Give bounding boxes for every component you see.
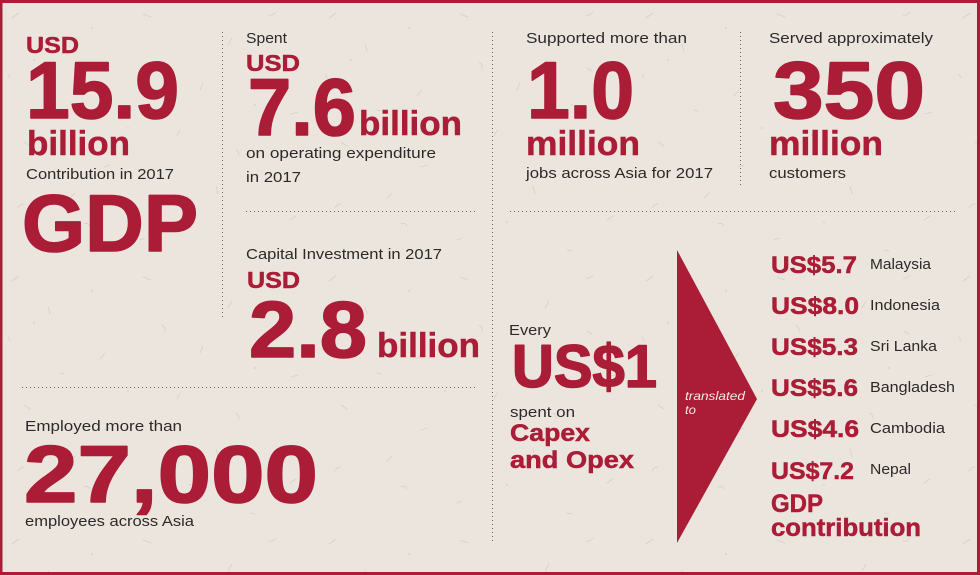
unit: million: million	[769, 125, 883, 163]
unit: million: million	[526, 125, 640, 163]
panel: capital investment	[246, 246, 480, 374]
panel: every US$1 spent	[509, 322, 657, 474]
panel: operating expenditure	[246, 30, 462, 186]
caption: capital investment: Capital Investment in 2017	[246, 246, 442, 263]
row: Cambodia: US$4.6	[771, 416, 859, 443]
figure: 15.9: 15.9	[26, 46, 179, 136]
row: Bangladesh: Bangladesh	[870, 379, 955, 396]
heading: Capex: Capex	[510, 420, 591, 447]
row: Malaysia: Malaysia	[870, 256, 932, 273]
caption: in 2017: in 2017	[246, 169, 301, 186]
figure: 350: 350	[773, 46, 925, 136]
caption: every: Every	[509, 322, 552, 339]
panel: GDP contribution	[22, 32, 198, 269]
row: Malaysia	[771, 252, 932, 279]
heading: USD: USD	[246, 50, 300, 76]
panel: GDP contribution by country	[771, 252, 955, 542]
caption: employees across Asia: employees across Asia	[25, 513, 195, 530]
caption: jobs across Asia: jobs across Asia for 2017	[525, 165, 713, 182]
row: Sri Lanka	[771, 334, 938, 361]
caption: contribution in 2017: Contribution in 2017	[26, 166, 174, 183]
caption: supported more than: Supported more than	[526, 30, 687, 47]
heading: USD: USD	[247, 267, 300, 293]
row: Nepal	[771, 458, 911, 485]
row: Nepal: US$7.2	[771, 458, 854, 485]
row: Sri Lanka: Sri Lanka	[870, 338, 938, 355]
panel: customers	[769, 30, 934, 182]
arrow: translated to: translated	[685, 389, 745, 403]
figure: US$1: US$1	[512, 333, 657, 400]
panel: employees	[24, 418, 318, 530]
unit: billion: billion	[359, 105, 462, 143]
row: Indonesia	[771, 293, 941, 320]
caption: employed more than: Employed more than	[25, 418, 182, 435]
heading: and Opex: and Opex	[510, 447, 635, 474]
caption: spent on: spent on	[510, 404, 575, 421]
figure: 27,000: 27,000	[24, 430, 318, 520]
unit: billion: billion	[377, 327, 480, 365]
row: Indonesia: Indonesia	[870, 297, 941, 314]
arrow: translated to	[677, 250, 757, 543]
panel: jobs	[525, 30, 713, 182]
heading: GDP: GDP	[22, 179, 198, 269]
caption: customers: customers	[769, 165, 846, 182]
arrow: translated to: to	[685, 403, 696, 417]
caption: spent: Spent	[246, 30, 288, 47]
figure: 7.6: 7.6	[248, 63, 356, 153]
figure: 1.0: 1.0	[527, 46, 634, 136]
unit: billion: billion	[27, 125, 130, 163]
row: Cambodia: Cambodia	[870, 420, 946, 437]
row: Cambodia	[771, 416, 946, 443]
row: Nepal: Nepal	[870, 461, 911, 478]
heading: USD: USD	[26, 32, 79, 58]
caption: on operating expenditure: on operating expenditure	[246, 145, 436, 162]
row: Sri Lanka: US$5.3	[771, 334, 858, 361]
caption: served approximately: Served approximately	[769, 30, 934, 47]
row: Malaysia: US$5.7	[771, 252, 857, 279]
heading: contribution: contribution	[771, 514, 921, 542]
row: Bangladesh: US$5.6	[771, 375, 858, 402]
heading: GDP: GDP	[771, 490, 823, 518]
row: Bangladesh	[771, 375, 955, 402]
figure: 2.8: 2.8	[249, 285, 367, 374]
row: Indonesia: US$8.0	[771, 293, 859, 320]
